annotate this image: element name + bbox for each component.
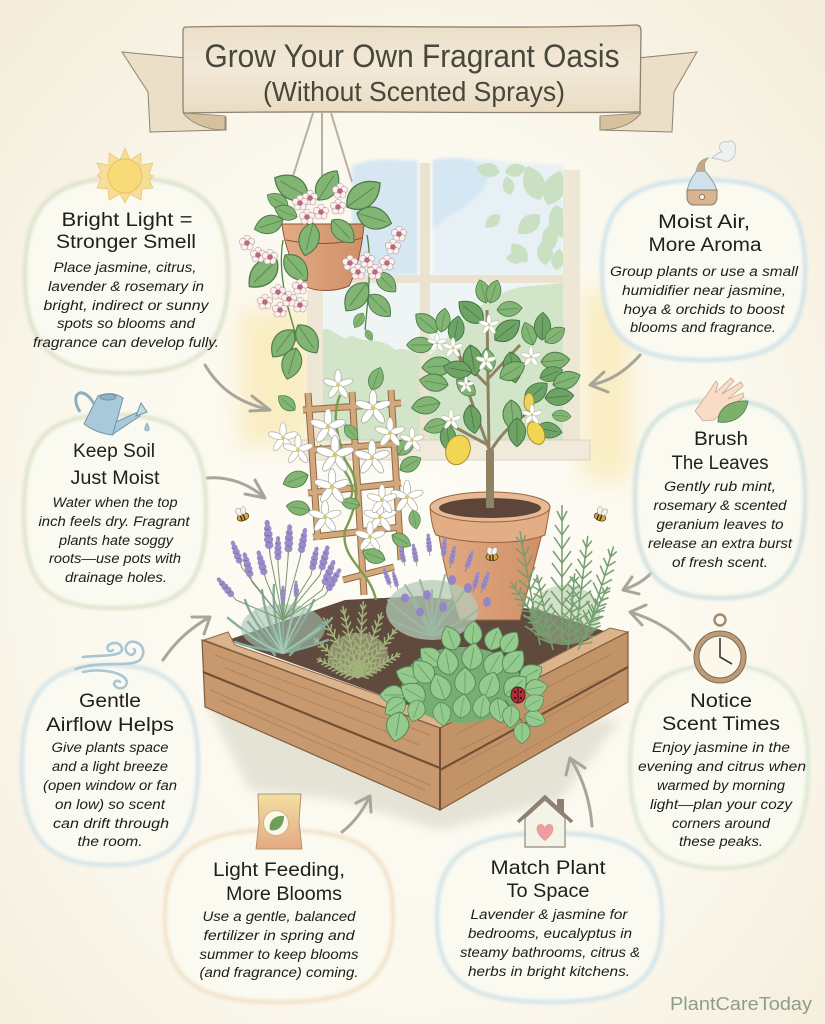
panel: moist air bbox=[602, 141, 805, 360]
panel text: drainage holes. bbox=[65, 570, 167, 585]
panel text bbox=[638, 691, 806, 849]
title text: (Without Scented Sprays) bbox=[263, 76, 565, 107]
panel text: lavender & rosemary in bbox=[48, 279, 204, 294]
panel text: roots—use pots with bbox=[49, 551, 181, 566]
title text bbox=[204, 38, 620, 107]
panel text: and a light breeze bbox=[52, 759, 168, 774]
panel text: Scent Times bbox=[662, 714, 780, 735]
panel text: To Space bbox=[506, 881, 590, 902]
panel text: Group plants or use a small bbox=[610, 264, 799, 279]
panel text: Bright Light = bbox=[62, 210, 192, 231]
window scene bbox=[240, 158, 632, 480]
mint plant bbox=[380, 620, 549, 744]
panel text: Moist Air, bbox=[658, 212, 750, 233]
panel text bbox=[33, 210, 219, 350]
panel text: Stronger Smell bbox=[56, 232, 196, 253]
panel text: bright, indirect or sunny bbox=[44, 298, 210, 313]
watermark: PlantCareToday bbox=[670, 994, 812, 1014]
panel text: hoya & orchids to boost bbox=[624, 302, 786, 317]
panel text: Lavender & jasmine for bbox=[470, 907, 628, 922]
panel text: Give plants space bbox=[52, 740, 168, 755]
panel text bbox=[38, 441, 191, 585]
panel text: blooms and fragrance. bbox=[630, 320, 776, 335]
bees bbox=[233, 505, 610, 561]
panel text: can drift through bbox=[53, 816, 169, 831]
panel text: Match Plant bbox=[490, 858, 606, 879]
panel text: inch feels dry. Fragrant bbox=[38, 514, 191, 529]
title text: Grow Your Own Fragrant Oasis bbox=[204, 38, 620, 74]
panel: keep soil bbox=[24, 393, 206, 608]
raised wooden bed bbox=[202, 596, 628, 830]
ladybug bbox=[511, 687, 525, 703]
panel: light feeding bbox=[165, 794, 393, 1002]
panel text: Gently rub mint, bbox=[664, 479, 776, 494]
icon: house with heart bbox=[518, 797, 572, 847]
rosemary bbox=[503, 505, 624, 654]
panel: bright light bbox=[25, 148, 228, 373]
panel text: Brush bbox=[694, 429, 748, 450]
thyme herb bbox=[309, 601, 403, 683]
panel text: rosemary & scented bbox=[654, 498, 787, 513]
panel text: the room. bbox=[78, 834, 142, 849]
panel text: Notice bbox=[690, 691, 752, 712]
panel text: on low) so scent bbox=[55, 797, 166, 812]
panel text: (and fragrance) coming. bbox=[200, 965, 358, 980]
lavender left bbox=[214, 519, 344, 655]
panel text: Place jasmine, citrus, bbox=[54, 260, 196, 275]
icon: humidifier bbox=[687, 141, 736, 205]
panel text: More Aroma bbox=[648, 235, 762, 256]
panel text: Water when the top bbox=[52, 495, 178, 510]
panel text bbox=[200, 860, 359, 980]
panel text: fertilizer in spring and bbox=[204, 928, 355, 943]
panel text: of fresh scent. bbox=[672, 555, 768, 570]
panel text: Light Feeding, bbox=[213, 860, 345, 881]
panel text: humidifier near jasmine, bbox=[622, 283, 786, 298]
title banner bbox=[122, 25, 697, 132]
panel text: these peaks. bbox=[679, 834, 763, 849]
panel text: plants hate soggy bbox=[58, 533, 174, 548]
panel text: geranium leaves to bbox=[656, 517, 784, 532]
panel: brush the leaves bbox=[635, 378, 805, 598]
panel text bbox=[648, 429, 793, 570]
panel text: More Blooms bbox=[226, 884, 342, 905]
arrows bbox=[163, 355, 690, 832]
lavender right bbox=[381, 533, 491, 640]
panel text: summer to keep blooms bbox=[200, 947, 359, 962]
jasmine trellis bbox=[267, 365, 425, 600]
icon: hand and leaf bbox=[695, 378, 748, 422]
hanging hoya basket bbox=[238, 113, 408, 382]
panel: match plant bbox=[437, 797, 662, 1002]
panel text: corners around bbox=[672, 816, 771, 831]
panel: gentle airflow bbox=[22, 642, 198, 865]
icon: pocket watch bbox=[694, 614, 746, 683]
lemon tree in terracotta pot bbox=[407, 278, 583, 620]
panel text: Enjoy jasmine in the bbox=[652, 740, 790, 755]
panel text: Just Moist bbox=[70, 468, 160, 489]
panel text: Gentle bbox=[79, 691, 141, 712]
panel text: (open window or fan bbox=[43, 778, 177, 793]
panel text bbox=[460, 858, 640, 979]
panel text: light—plan your cozy bbox=[650, 797, 793, 812]
panel text bbox=[43, 691, 177, 849]
panel text: bedrooms, eucalyptus in bbox=[468, 926, 632, 941]
panel text: fragrance can develop fully. bbox=[33, 335, 219, 350]
panel text: warmed by morning bbox=[657, 778, 786, 793]
panel text: Use a gentle, balanced bbox=[202, 909, 356, 924]
panel text: spots so blooms and bbox=[57, 316, 196, 331]
panel text: steamy bathrooms, citrus & bbox=[460, 945, 640, 960]
icon: fertilizer bag bbox=[256, 794, 302, 849]
panel text bbox=[610, 212, 799, 335]
panel text: evening and citrus when bbox=[638, 759, 806, 774]
panel text: Keep Soil bbox=[73, 441, 155, 462]
icon: sun bbox=[97, 148, 153, 203]
panel text: herbs in bright kitchens. bbox=[468, 964, 630, 979]
panel: notice scent times bbox=[630, 614, 808, 868]
icon: wind bbox=[76, 642, 143, 688]
icon: watering can bbox=[76, 393, 149, 435]
panel text: Airflow Helps bbox=[46, 715, 174, 736]
panel text: The Leaves bbox=[672, 453, 768, 474]
panel text: release an extra burst bbox=[648, 536, 793, 551]
